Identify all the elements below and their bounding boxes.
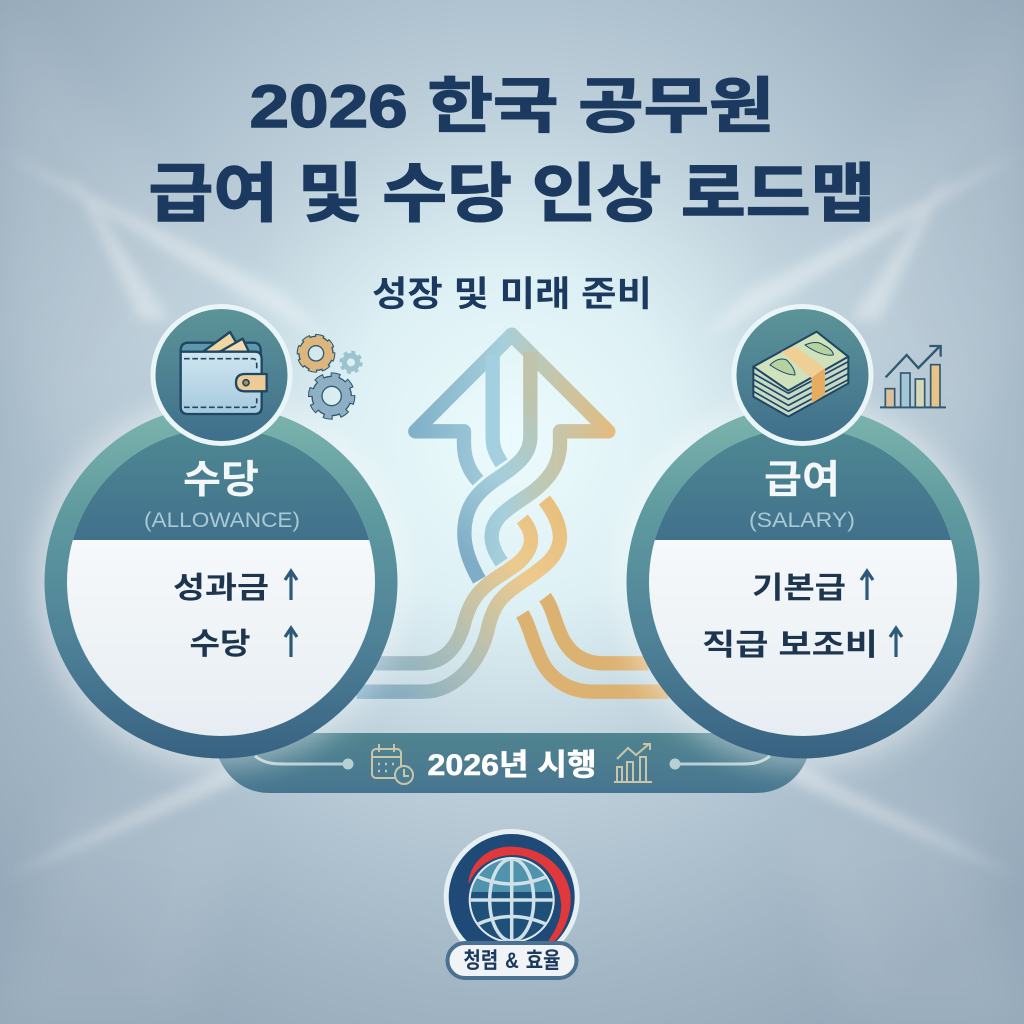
title [148, 73, 876, 230]
panel: allowance [35, 396, 407, 768]
sub heading: (SALARY) [749, 509, 855, 532]
icon: growth chart [614, 744, 652, 782]
header band [73, 434, 369, 540]
gold gear [301, 338, 331, 369]
item: performance pay: 성과금 [173, 572, 269, 605]
item: base pay [752, 571, 873, 605]
pill label [448, 943, 576, 978]
bottom bar: 2026 implementation [212, 733, 812, 793]
white body [640, 425, 960, 745]
arrow: braided growth arrow [357, 335, 668, 692]
label: 2026년 시행 [428, 749, 596, 782]
left connector [255, 756, 354, 770]
ring [44, 406, 398, 758]
item: allowance [190, 628, 297, 661]
icon: calendar with clock [372, 744, 413, 784]
globe [469, 857, 555, 943]
icon: money stack badge [732, 304, 874, 446]
header band [655, 434, 951, 540]
blue gear [312, 377, 351, 415]
sub heading: (ALLOWANCE) [144, 509, 300, 532]
pill label: 청렴 & 효율 [464, 948, 560, 973]
item: base pay: 기본급 [752, 572, 846, 605]
red swoosh [468, 847, 571, 942]
item: rank allowance: 직급 보조비 [702, 629, 878, 662]
icon: wallet badge [150, 304, 292, 446]
title: 2026 한국 공무원 [250, 73, 774, 140]
icon: gears [301, 338, 361, 415]
title: 급여 및 수당 인상 로드맵 [148, 158, 876, 230]
heading: 수당 [183, 459, 259, 502]
heading: 급여 [764, 459, 840, 502]
right connector [670, 756, 770, 770]
emblem disc [449, 834, 575, 960]
white body [60, 425, 380, 745]
emblem: integrity and efficiency [444, 829, 580, 978]
icon: bar chart with arrow [880, 346, 946, 407]
panel: salary [617, 396, 989, 768]
item: allowance: 수당 [190, 628, 250, 661]
small gear [341, 353, 361, 372]
item: performance pay [173, 571, 297, 605]
subtitle: 성장 및 미래 준비 [372, 275, 652, 314]
ring [626, 406, 980, 758]
